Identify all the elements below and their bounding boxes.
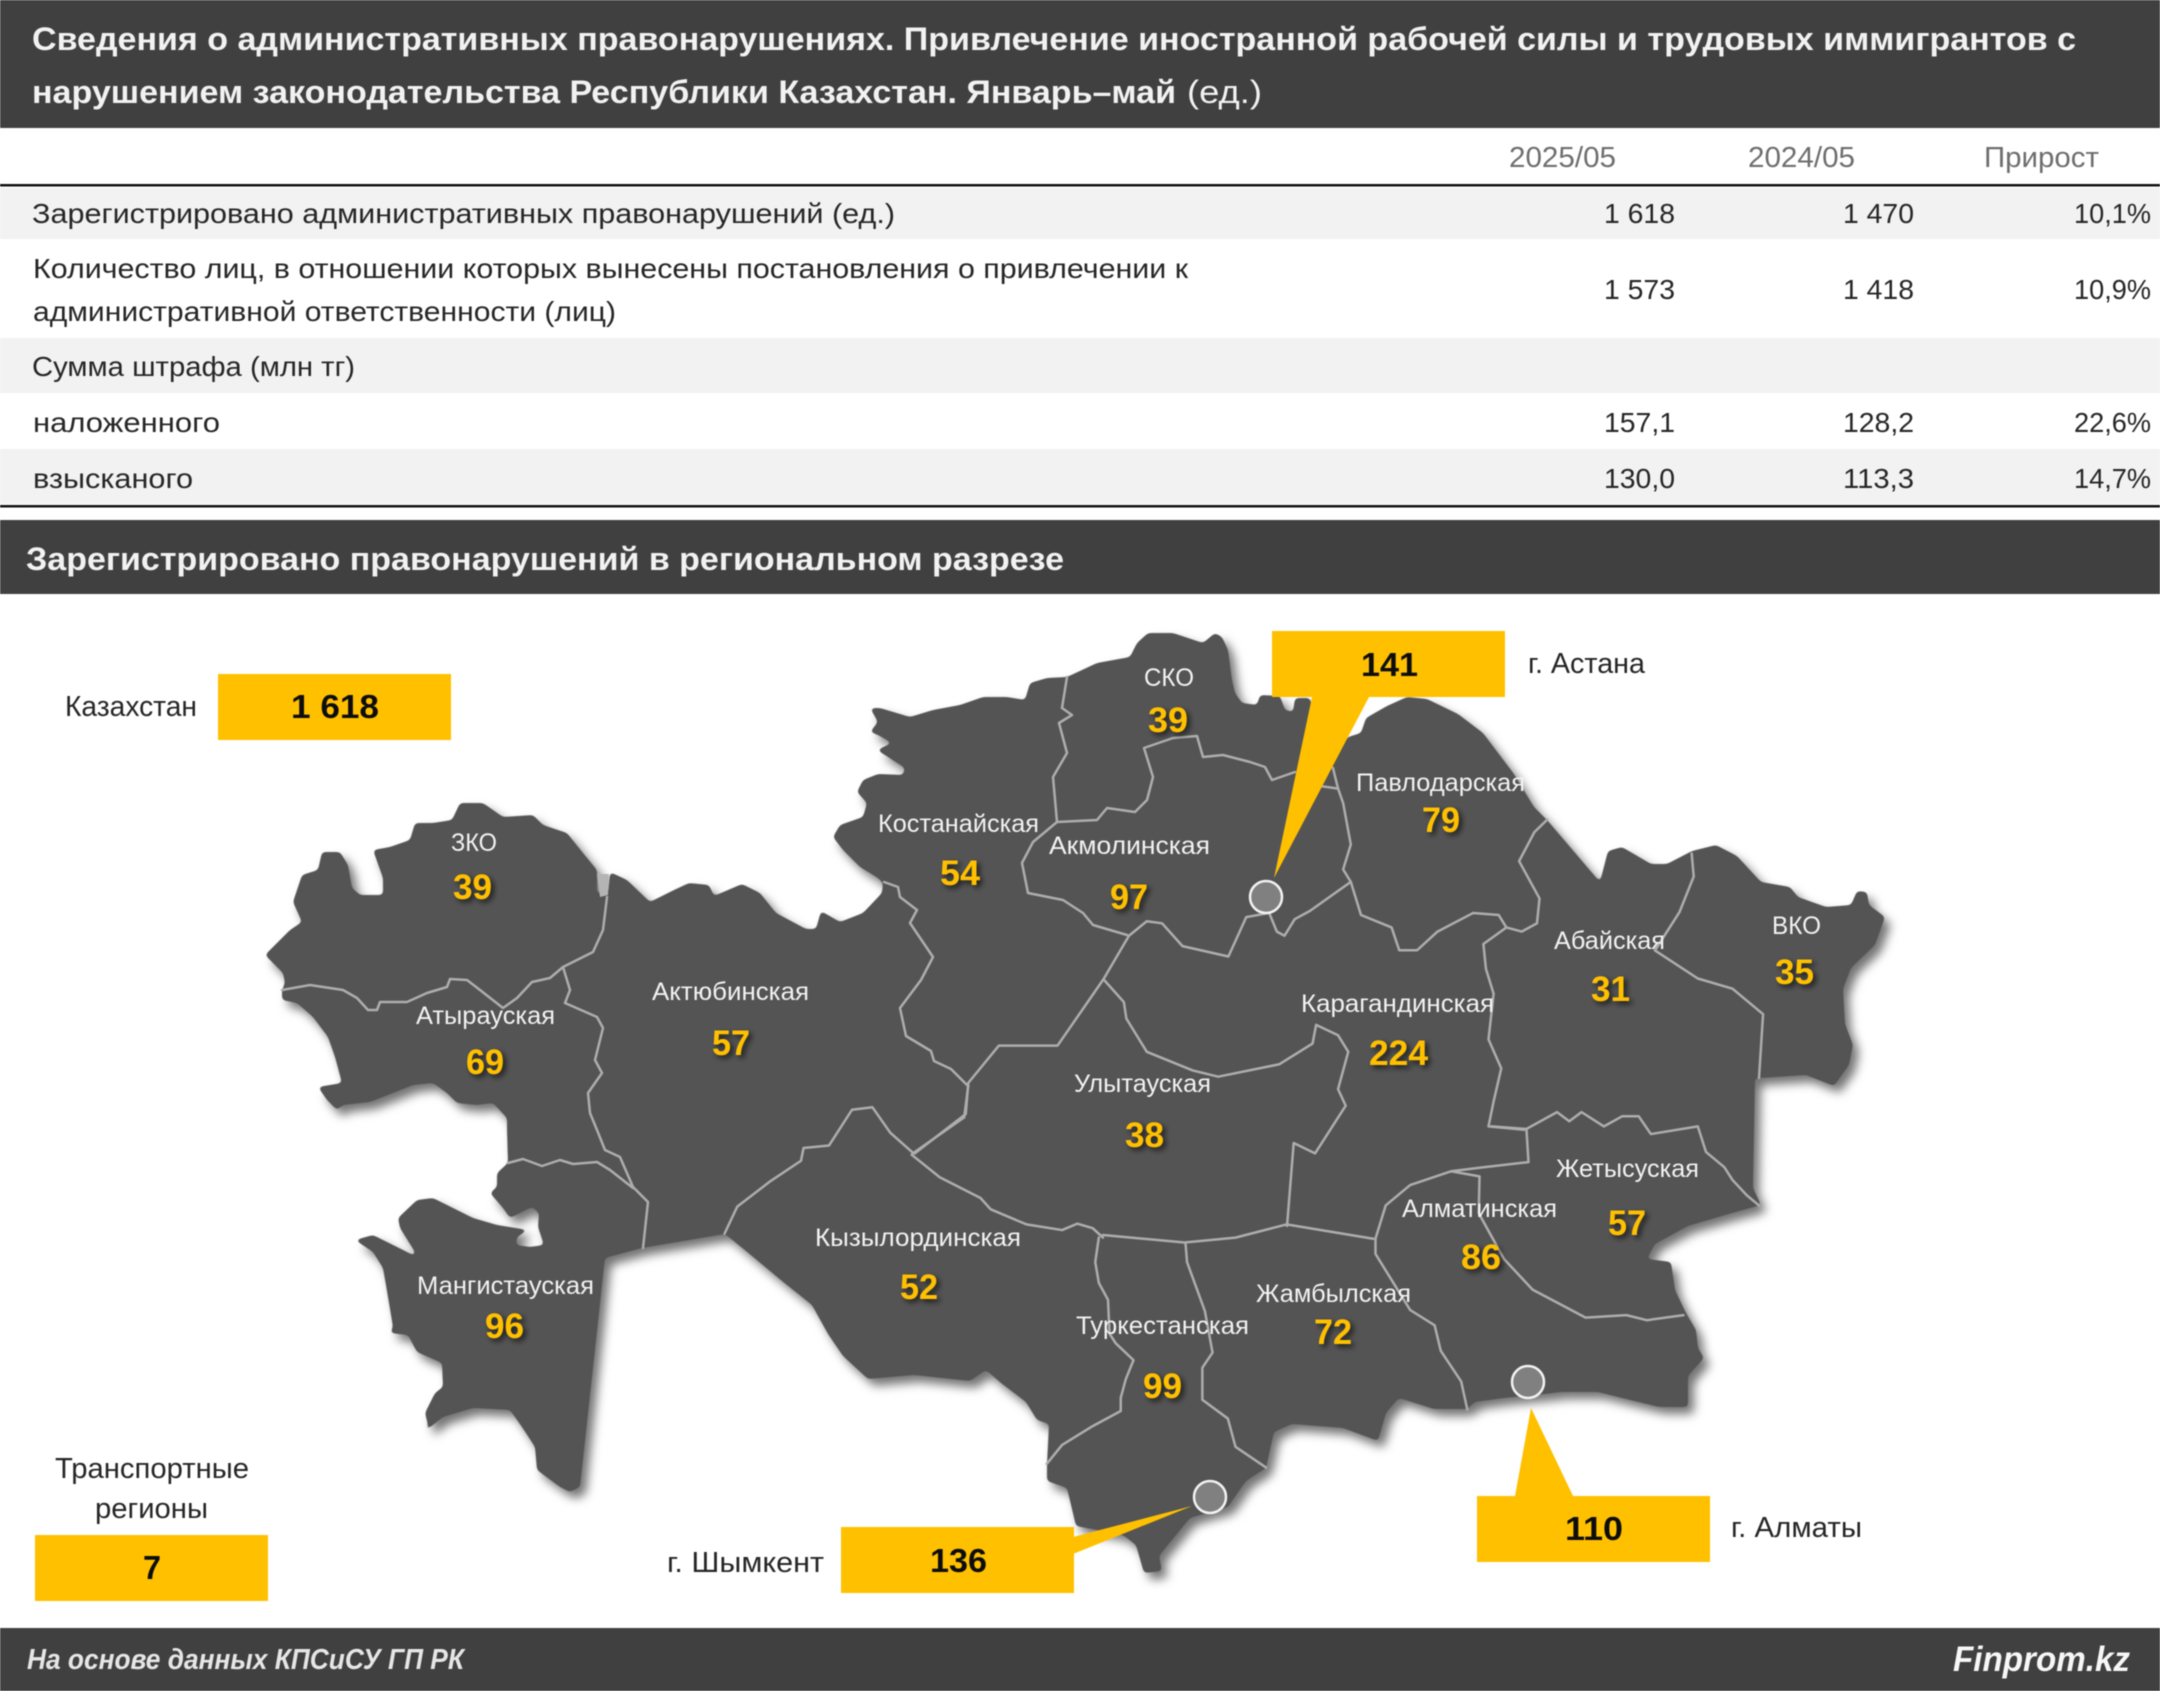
- region values: 39: [453, 868, 492, 907]
- table header: 2024/05: [1748, 142, 1855, 174]
- brand name: Finprom.kz: [1953, 1640, 2130, 1679]
- row: fines collected: 130,0: [1604, 463, 1675, 494]
- row: persons held liable: 10,9%: [2074, 274, 2151, 305]
- region names: Жетысуская: [1556, 1155, 1699, 1183]
- row: registered offences: 1 618: [1604, 198, 1675, 229]
- callout: transport regions: 7: [143, 1549, 161, 1586]
- callout: Kazakhstan total: 1 618: [291, 688, 379, 725]
- section heading band: [0, 520, 2160, 594]
- table header: [0, 142, 2160, 186]
- row: fines imposed: [33, 407, 2151, 438]
- region values: 96: [485, 1307, 524, 1346]
- region values: 52: [900, 1268, 938, 1307]
- callout: Shymkent: г. Шымкент: [667, 1547, 824, 1579]
- callout: Astana: [1250, 631, 1646, 913]
- row: persons held liable: Количество лиц, в отношении которых вынесены постановления о привлечении к: [33, 253, 1189, 284]
- region names: Туркестанская: [1076, 1312, 1249, 1340]
- region names: Костанайская: [878, 810, 1039, 838]
- title band: нарушением законодательства Республики Казахстан. Январь–май: [32, 74, 1176, 110]
- table header: 2025/05: [1509, 142, 1616, 174]
- row: fine amount heading: [0, 338, 2160, 393]
- region names: Жамбылская: [1256, 1280, 1411, 1308]
- row: fines collected: [0, 449, 2160, 508]
- region names: [416, 664, 1821, 1340]
- region names: СКО: [1144, 664, 1194, 692]
- region names: Абайская: [1554, 927, 1665, 955]
- title band: [0, 0, 2160, 128]
- region values: 99: [1143, 1367, 1182, 1406]
- callout: Kazakhstan total: Казахстан: [65, 691, 197, 723]
- region values: 39: [1148, 701, 1188, 740]
- row: fine amount heading: Сумма штрафа (млн тг): [32, 351, 355, 382]
- callout: Almaty: 110: [1565, 1510, 1623, 1547]
- callout: Almaty: г. Алматы: [1731, 1512, 1862, 1544]
- callout: Kazakhstan total: [65, 674, 451, 740]
- region values: 57: [1608, 1204, 1646, 1243]
- region values: 57: [712, 1024, 750, 1063]
- row: fines collected: взысканого: [33, 463, 193, 494]
- row: persons held liable: административной ответственности (лиц): [33, 296, 616, 327]
- row: registered offences: 10,1%: [2074, 198, 2151, 229]
- region values: 97: [1110, 878, 1148, 917]
- region names: Кызылординская: [815, 1224, 1021, 1252]
- row: persons held liable: [33, 253, 2151, 327]
- callout: Shymkent: [667, 1481, 1226, 1593]
- region values: 224: [1369, 1034, 1429, 1073]
- row: persons held liable: 1 418: [1843, 274, 1914, 305]
- row: registered offences: Зарегистрировано административных правонарушений (ед.): [32, 198, 895, 229]
- table header: Прирост: [1984, 142, 2099, 174]
- callout: Shymkent: 136: [930, 1542, 987, 1579]
- section heading band: Зарегистрировано правонарушений в региональном разрезе: [26, 541, 1064, 577]
- row: registered offences: 1 470: [1843, 198, 1914, 229]
- region names: Улытауская: [1074, 1070, 1211, 1098]
- region values: 31: [1591, 970, 1630, 1009]
- callout: transport regions: регионы: [95, 1493, 208, 1525]
- title band: Сведения о административных правонарушениях. Привлечение иностранной рабочей силы и трудовых иммигрантов с: [32, 21, 2076, 57]
- region values: 35: [1775, 953, 1814, 992]
- lake patch on northern border: [597, 874, 609, 897]
- row: persons held liable: 1 573: [1604, 274, 1675, 305]
- row: fines imposed: наложенного: [33, 407, 220, 438]
- region values: 72: [1314, 1313, 1352, 1352]
- callout: Astana: г. Астана: [1528, 648, 1646, 680]
- region values: 54: [940, 854, 981, 893]
- region names: Атырауская: [416, 1002, 555, 1030]
- row: fines imposed: 22,6%: [2074, 407, 2151, 438]
- regional borders: [282, 677, 1763, 1468]
- title band: (ед.): [1187, 74, 1262, 110]
- region values: 86: [1461, 1238, 1501, 1277]
- region names: Актюбинская: [652, 978, 809, 1006]
- data table: [0, 142, 2160, 508]
- country outline: [265, 633, 1885, 1573]
- source note: На основе данных КПСиСУ ГП РК: [27, 1644, 466, 1676]
- region values: 69: [466, 1043, 504, 1082]
- callout: transport regions: [35, 1453, 268, 1601]
- region values: [453, 701, 1814, 1406]
- callout: Astana: 141: [1361, 646, 1418, 683]
- footer band: [0, 1628, 2160, 1691]
- row: fines collected: 14,7%: [2074, 463, 2151, 494]
- region names: Алматинская: [1402, 1195, 1557, 1223]
- region values: 79: [1422, 801, 1460, 840]
- callout: Almaty: [1477, 1366, 1862, 1562]
- region names: Мангистауская: [417, 1272, 594, 1300]
- region names: Павлодарская: [1356, 769, 1525, 797]
- row: fines imposed: 128,2: [1843, 407, 1914, 438]
- map of Kazakhstan: [265, 633, 1885, 1573]
- row: registered offences: [0, 188, 2160, 239]
- row: fines imposed: 157,1: [1604, 407, 1675, 438]
- region names: ЗКО: [451, 829, 497, 857]
- region values: 38: [1125, 1116, 1164, 1155]
- region names: ВКО: [1772, 912, 1821, 940]
- callout: transport regions: Транспортные: [55, 1453, 249, 1485]
- region names: Акмолинская: [1049, 832, 1210, 860]
- row: fines collected: 113,3: [1843, 463, 1914, 494]
- region names: Карагандинская: [1301, 990, 1494, 1018]
